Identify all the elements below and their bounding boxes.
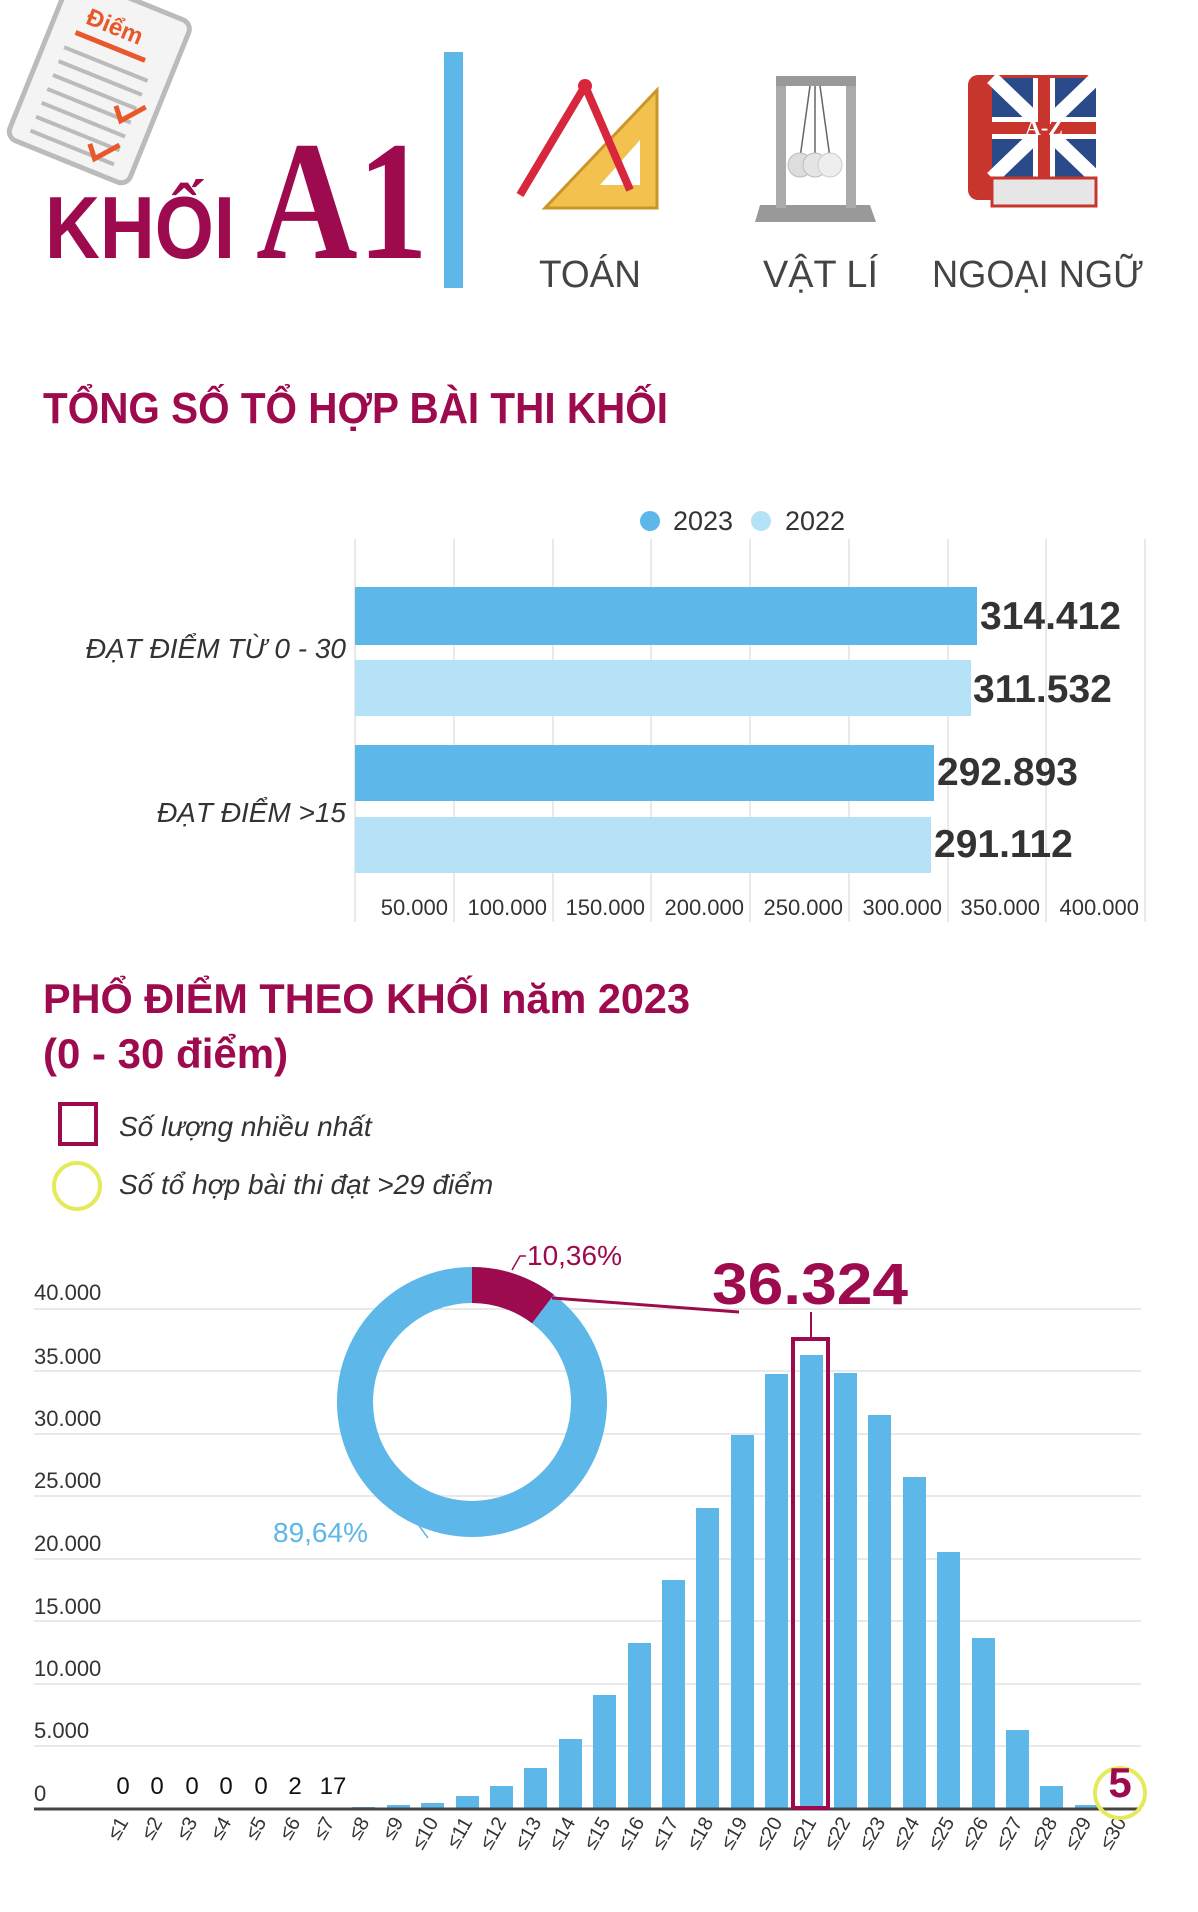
legend: highlight markers: Số tổ hợp bài thi đạt >29 điểm bbox=[119, 1169, 493, 1200]
icon: score sheet bbox=[6, 0, 192, 186]
histogram: score distribution: ≤8 bbox=[344, 1814, 374, 1844]
histogram: score distribution: 10.000 bbox=[34, 1656, 101, 1681]
histogram: score distribution: ≤12 bbox=[476, 1814, 511, 1853]
heading: KHỐI A1: KHỐI bbox=[45, 178, 235, 277]
histogram: score distribution: ≤1 bbox=[103, 1814, 133, 1844]
donut chart bbox=[273, 1240, 739, 1548]
histogram: score distribution: ≤10 bbox=[408, 1814, 443, 1853]
histogram: score distribution: 0 bbox=[150, 1773, 164, 1800]
bar chart: totals: 291.112 bbox=[934, 823, 1073, 866]
histogram: score distribution: 30.000 bbox=[34, 1406, 101, 1431]
bar chart: totals: 314.412 bbox=[980, 595, 1121, 638]
histogram: score distribution: ≤22 bbox=[820, 1814, 855, 1853]
histogram: score distribution: ≤30 bbox=[1096, 1814, 1131, 1853]
histogram: score distribution: ≤3 bbox=[172, 1814, 202, 1844]
histogram: score distribution: ≤17 bbox=[648, 1814, 683, 1853]
histogram: score distribution bbox=[34, 1280, 1141, 1853]
histogram: score distribution: 25.000 bbox=[34, 1468, 101, 1493]
bar chart: totals: 200.000 bbox=[664, 895, 744, 920]
icon: English book bbox=[968, 75, 1096, 206]
histogram: score distribution: 0 bbox=[185, 1773, 199, 1800]
legend: years: 2023 bbox=[673, 506, 733, 536]
histogram: score distribution: ≤16 bbox=[614, 1814, 649, 1853]
donut chart: 10,36% bbox=[527, 1240, 622, 1271]
histogram: score distribution: 0 bbox=[219, 1773, 233, 1800]
title: score distribution: PHỔ ĐIỂM THEO KHỐI năm 2023 bbox=[43, 973, 690, 1022]
histogram: score distribution: ≤18 bbox=[683, 1814, 718, 1853]
bar chart: totals: 311.532 bbox=[973, 668, 1112, 711]
heading: KHỐI A1: A1 bbox=[256, 107, 428, 295]
histogram: score distribution: 35.000 bbox=[34, 1344, 101, 1369]
histogram: score distribution: 15.000 bbox=[34, 1594, 101, 1619]
bar chart: totals: 350.000 bbox=[960, 895, 1040, 920]
histogram: score distribution: ≤19 bbox=[717, 1814, 752, 1853]
legend: years bbox=[640, 506, 845, 536]
icon: score sheet: Điểm bbox=[82, 4, 147, 51]
histogram: score distribution: ≤29 bbox=[1061, 1814, 1096, 1853]
subject labels: NGOẠI NGỮ bbox=[932, 252, 1144, 296]
histogram: score distribution: ≤25 bbox=[924, 1814, 959, 1853]
bar chart: totals: 150.000 bbox=[565, 895, 645, 920]
histogram: score distribution: ≤11 bbox=[442, 1814, 477, 1852]
histogram: score distribution: ≤14 bbox=[545, 1814, 580, 1853]
bar chart: totals: 250.000 bbox=[763, 895, 843, 920]
subject labels: TOÁN bbox=[539, 253, 641, 296]
histogram: score distribution: ≤28 bbox=[1027, 1814, 1062, 1853]
histogram: score distribution: 5.000 bbox=[34, 1718, 89, 1743]
histogram: score distribution: ≤15 bbox=[580, 1814, 615, 1853]
bar chart: totals: ĐẠT ĐIỂM TỪ 0 - 30 bbox=[86, 633, 346, 664]
heading: KHỐI A1 bbox=[45, 107, 428, 295]
histogram: score distribution: 2 bbox=[288, 1773, 302, 1800]
histogram: score distribution: ≤20 bbox=[752, 1814, 787, 1853]
bar chart: totals: 50.000 bbox=[381, 895, 448, 920]
highlight: max bar bbox=[793, 1312, 828, 1808]
bar chart: totals: ĐẠT ĐIỂM >15 bbox=[157, 797, 346, 828]
histogram: score distribution: ≤6 bbox=[275, 1814, 305, 1844]
histogram: score distribution: ≤27 bbox=[992, 1814, 1027, 1853]
bar chart: totals bbox=[86, 539, 1145, 922]
bar chart: totals: 292.893 bbox=[937, 751, 1078, 794]
histogram: score distribution: 20.000 bbox=[34, 1531, 101, 1556]
bar chart: totals: 100.000 bbox=[467, 895, 547, 920]
histogram: score distribution: ≤7 bbox=[309, 1814, 339, 1844]
subject labels: VẬT LÍ bbox=[763, 253, 878, 296]
histogram: score distribution: ≤9 bbox=[378, 1814, 408, 1844]
icon: compass and set square bbox=[520, 79, 657, 208]
callout: top score count bbox=[1095, 1759, 1145, 1818]
histogram: score distribution: 17 bbox=[320, 1773, 346, 1800]
histogram: score distribution: ≤13 bbox=[511, 1814, 546, 1853]
histogram: score distribution: 0 bbox=[254, 1773, 268, 1800]
histogram: score distribution: 40.000 bbox=[34, 1280, 101, 1305]
title: score distribution: (0 - 30 điểm) bbox=[43, 1030, 288, 1077]
histogram: score distribution: ≤26 bbox=[958, 1814, 993, 1853]
histogram: score distribution: ≤5 bbox=[241, 1814, 271, 1844]
title: total combinations: TỔNG SỐ TỔ HỢP BÀI THI KHỐI bbox=[43, 382, 668, 433]
histogram: score distribution: 0 bbox=[116, 1773, 130, 1800]
divider bar bbox=[444, 52, 463, 288]
legend: highlight markers: Số lượng nhiều nhất bbox=[119, 1111, 373, 1142]
icon: Newton's cradle bbox=[755, 76, 876, 222]
callout: max value: 36.324 bbox=[712, 1252, 908, 1317]
histogram: score distribution: ≤23 bbox=[855, 1814, 890, 1853]
callout: top score count: 5 bbox=[1108, 1759, 1132, 1806]
histogram: score distribution: ≤21 bbox=[786, 1814, 821, 1853]
bar chart: totals: 400.000 bbox=[1059, 895, 1139, 920]
histogram: score distribution: ≤24 bbox=[889, 1814, 924, 1853]
icon: English book: A-Z bbox=[1025, 115, 1063, 140]
title: score distribution bbox=[43, 973, 690, 1077]
histogram: score distribution: ≤2 bbox=[137, 1814, 167, 1844]
subject labels bbox=[539, 252, 1144, 296]
legend: highlight markers bbox=[54, 1104, 493, 1209]
donut chart: 89,64% bbox=[273, 1517, 368, 1548]
bar chart: totals: 300.000 bbox=[862, 895, 942, 920]
legend: years: 2022 bbox=[785, 506, 845, 536]
histogram: score distribution: 0 bbox=[34, 1781, 46, 1806]
histogram: score distribution: ≤4 bbox=[206, 1814, 236, 1844]
